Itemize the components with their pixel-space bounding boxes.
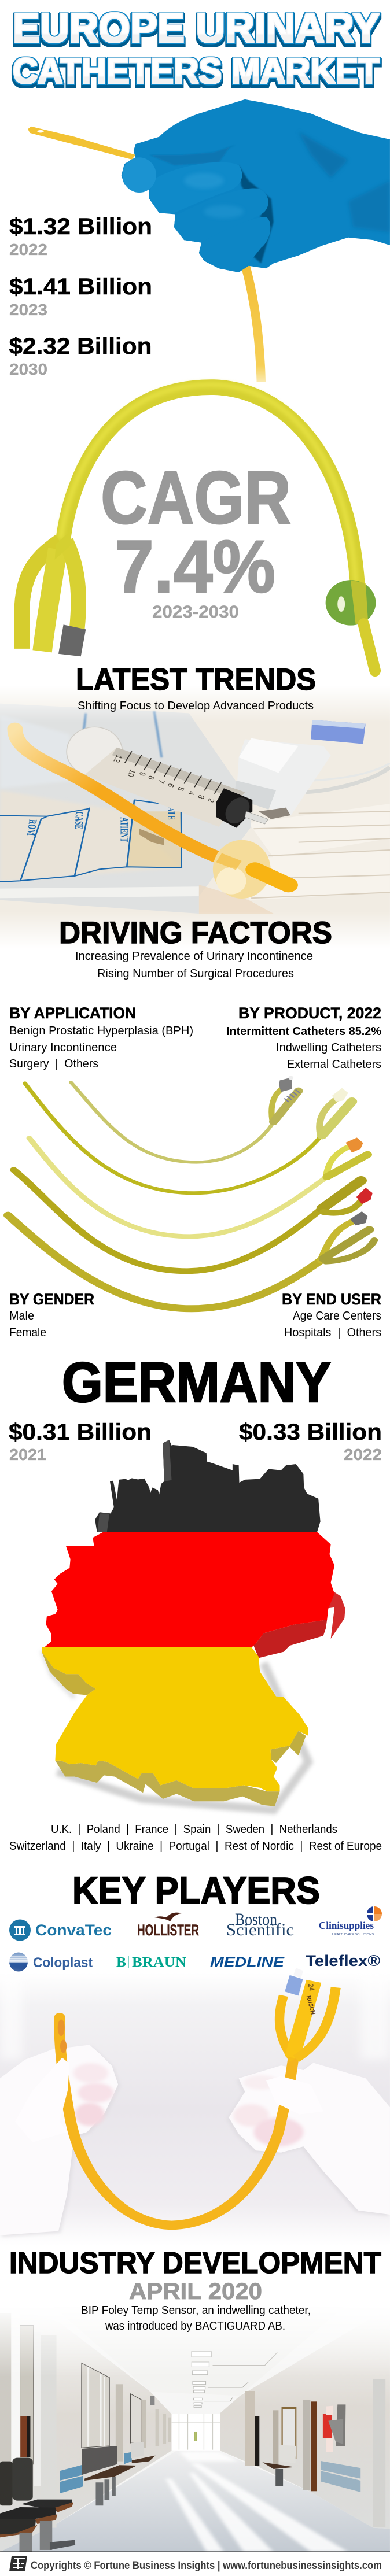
photo: catheter, syringe and urine bag: 3	[196, 794, 207, 800]
photo: catheter, syringe and urine bag: 10	[126, 768, 138, 778]
photo: catheter, syringe and urine bag: 7	[156, 778, 167, 785]
photo: catheter, syringe and urine bag: 5	[175, 786, 186, 792]
Germany value 2022: $0.33 Billion	[239, 1420, 382, 1445]
segment: by end user: BY END USER	[282, 1291, 381, 1308]
market size 2022: 2022	[9, 241, 47, 258]
heading: industry development: INDUSTRY DEVELOPMENT	[9, 2246, 381, 2280]
market size 2030: 2030	[9, 360, 47, 378]
orange catheter	[15, 729, 219, 858]
photo: catheter, syringe and urine bag: ROM	[24, 819, 39, 836]
segment: by product: External Catheters	[287, 1058, 381, 1071]
segment: by gender: BY GENDER	[9, 1291, 94, 1308]
segment: by product: BY PRODUCT, 2022	[238, 1004, 381, 1022]
wall sign and fire extinguisher	[323, 2404, 345, 2452]
ceiling	[50, 2303, 348, 2396]
text: development description: BIP Foley Temp Sensor, an indwelling catheter,	[81, 2304, 311, 2317]
catheter 2	[25, 1083, 352, 1193]
end window	[172, 2414, 220, 2451]
right hand	[227, 2063, 390, 2216]
map: Germany in flag colours	[42, 1440, 345, 1810]
title: CATHETERS MARKET	[13, 51, 380, 91]
right wall details	[245, 2391, 255, 2466]
heading: Germany: GERMANY	[62, 1351, 331, 1414]
syringe	[67, 727, 122, 777]
footer	[0, 2551, 390, 2572]
logo: Hollister	[137, 1913, 199, 1939]
Germany value 2022: 2022	[344, 1446, 382, 1463]
photo: catheter, syringe and urine bag: 12	[112, 754, 124, 764]
logo: ConvaTec: ConvaTec	[35, 1921, 112, 1939]
market size 2023: $1.41 Billion	[9, 274, 152, 300]
illustration: blue glove hand holding catheter	[28, 99, 390, 382]
photo: hospital corridor	[0, 2303, 390, 2552]
photo: catheter, syringe and urine bag: ATIENT	[118, 817, 130, 842]
left wall	[0, 2350, 171, 2551]
right wall	[220, 2350, 390, 2529]
logo: Boston Scientific: Scientific	[226, 1920, 294, 1939]
segment: by application: BY APPLICATION	[9, 1004, 136, 1022]
segment: by application: Benign Prostatic Hyperplasia (BPH)	[9, 1024, 193, 1037]
segment: by application: Surgery | Others	[9, 1057, 98, 1070]
logo: Hollister: HOLLISTER	[137, 1921, 199, 1939]
segment: by product: Indwelling Catheters	[276, 1041, 381, 1054]
segment: by application: Urinary Incontinence	[9, 1041, 117, 1054]
heading: driving factors: DRIVING FACTORS	[59, 916, 332, 950]
benches	[0, 2442, 296, 2552]
logo: Clinisupplies: HEALTHCARE SOLUTIONS	[332, 1933, 374, 1936]
heading: latest trends: LATEST TRENDS	[76, 663, 316, 697]
Germany value 2021	[9, 1420, 152, 1463]
catheter 4	[14, 1170, 373, 1271]
Germany value 2021: $0.31 Billion	[9, 1420, 152, 1445]
logo: Coloplast	[9, 1952, 93, 1972]
catheter 3	[30, 1137, 367, 1236]
wall bumpers	[321, 2461, 360, 2492]
logo: Clinisupplies	[319, 1906, 382, 1936]
segment: by product	[226, 1004, 381, 1071]
segment: by gender: Female	[9, 1326, 46, 1339]
text: development description: was introduced by BACTIGUARD AB.	[105, 2319, 285, 2333]
text: driving factors list	[75, 949, 313, 980]
bag measurement lines	[0, 800, 182, 882]
yellow catheter: 24	[306, 1983, 317, 1991]
logo: Clinisupplies: Clinisupplies	[319, 1920, 374, 1931]
thumbs	[15, 2058, 69, 2142]
logo: B Braun: BRAUN	[132, 1955, 187, 1970]
text: development description	[81, 2304, 311, 2333]
text: development date: APRIL 2020	[129, 2279, 262, 2304]
logo: B Braun: B	[116, 1955, 126, 1970]
Germany value 2021: 2021	[9, 1446, 46, 1463]
heading: key players: KEY PLAYERS	[72, 1869, 320, 1912]
photo: catheter, syringe and urine bag: 9	[137, 771, 148, 777]
text: driving factors list: Increasing Prevalence of Urinary Incontinence	[75, 949, 313, 963]
lights	[192, 2352, 211, 2407]
text: other countries: U.K. | Poland | France | Spain | Sweden | Netherlands	[51, 1823, 337, 1836]
segment: by product: Intermittent Catheters 85.2%	[226, 1025, 381, 1038]
left windows	[0, 2313, 11, 2462]
segment: by application	[9, 1004, 193, 1070]
photo: catheter, syringe and urine bag: 8	[146, 775, 157, 781]
CAGR callout	[101, 456, 291, 622]
text: driving factors list: Rising Number of Surgical Procedures	[97, 967, 294, 980]
CAGR callout: CAGR	[101, 456, 291, 539]
logo: Boston Scientific: Boston	[235, 1910, 277, 1929]
photo: catheter, syringe and urine bag: 4	[186, 790, 197, 796]
logo: ConvaTec	[9, 1920, 112, 1941]
market size 2030: $2.32 Billion	[9, 334, 152, 359]
market size 2022: $1.32 Billion	[9, 214, 152, 239]
market size 2023: 2023	[9, 301, 47, 319]
logo: Boston Scientific	[226, 1910, 294, 1939]
catheter 1	[71, 1076, 299, 1162]
title	[13, 5, 380, 91]
photo: catheter, syringe and urine bag	[0, 696, 390, 937]
CAGR callout: 2023-2030	[152, 603, 239, 622]
photo: catheter, syringe and urine bag: 2	[206, 797, 216, 804]
text: other countries	[9, 1823, 382, 1853]
logo: Coloplast: Coloplast	[33, 1955, 93, 1971]
illustration: large yellow foley catheter arch	[22, 385, 376, 671]
photo: catheter, syringe and urine bag: 6	[165, 782, 176, 789]
segment: by end user: Age Care Centers	[293, 1309, 381, 1322]
segment: by end user	[282, 1291, 381, 1339]
logo: Fortune Business Insights	[9, 2556, 27, 2571]
yellow catheter: RUSCH	[304, 1995, 316, 2015]
photo: catheter, syringe and urine bag: CASE	[72, 811, 85, 829]
title: EUROPE URINARY	[13, 5, 380, 51]
market size 2030	[9, 334, 152, 378]
left hand	[0, 2045, 120, 2237]
text: trend description: Shifting Focus to Develop Advanced Products	[78, 699, 314, 712]
catheter 5	[8, 1211, 374, 1309]
segment: by gender: Male	[9, 1309, 34, 1322]
Germany value 2022	[239, 1420, 382, 1463]
CAGR callout: 7.4%	[115, 526, 275, 608]
photo: gloved hands holding catheter	[0, 1968, 390, 2246]
market size 2022	[9, 214, 152, 258]
market size 2023	[9, 274, 152, 319]
segment: by end user: Hospitals | Others	[284, 1326, 381, 1339]
logo: Medline: MEDLINE	[210, 1954, 285, 1970]
yellow catheter	[58, 1968, 336, 2226]
logo: Teleflex: Teleflex®	[306, 1952, 380, 1969]
floor	[0, 2451, 390, 2552]
photo: catheter, syringe and urine bag: DATE	[165, 802, 177, 820]
segment: by gender	[9, 1291, 94, 1339]
illustration: five foley catheters	[8, 1076, 374, 1309]
